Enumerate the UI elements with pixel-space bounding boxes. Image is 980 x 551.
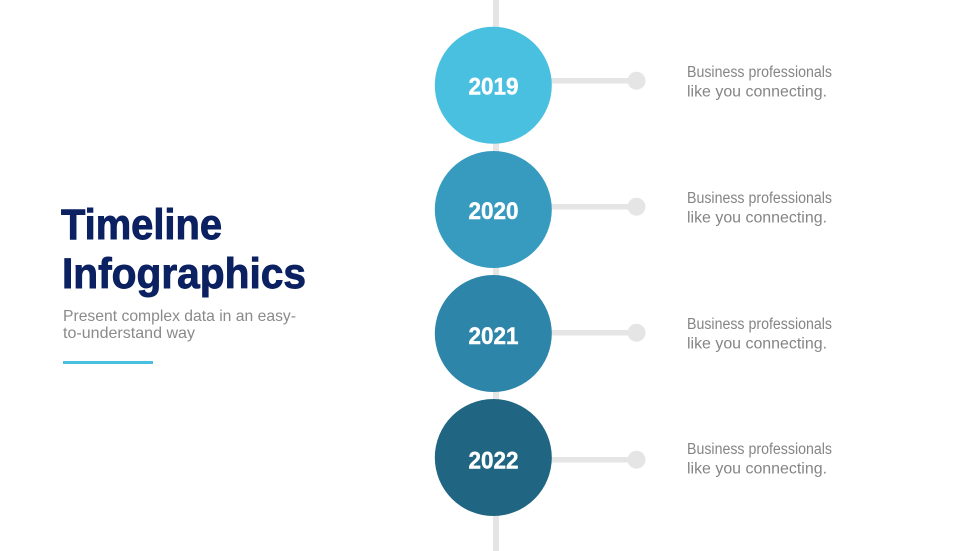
title: [61, 201, 306, 298]
year label: 2019: [468, 74, 518, 100]
connector with dot: [550, 198, 646, 216]
timeline item: 2019: [435, 27, 832, 144]
left heading block: [61, 201, 306, 364]
vertical timeline axis: [493, 0, 499, 551]
subtitle: Present complex data in an easy-: [63, 308, 296, 325]
description: [687, 190, 832, 226]
timeline item: 2020: [435, 151, 832, 268]
year label: 2021: [468, 323, 518, 350]
title: Timeline: [61, 201, 222, 249]
connector with dot: [550, 451, 646, 469]
timeline item: 2021: [435, 275, 832, 392]
description: like you connecting.: [687, 460, 827, 478]
year circle: [435, 151, 552, 268]
connector with dot: [550, 324, 646, 342]
description: Business professionals: [687, 190, 832, 207]
year circle: [435, 399, 552, 516]
timeline item: 2022: [435, 399, 832, 516]
accent underline: [63, 361, 153, 364]
description: Business professionals: [687, 64, 832, 81]
year circle: [435, 275, 552, 392]
year label: 2022: [468, 448, 518, 474]
year circle: [435, 27, 552, 144]
description: Business professionals: [687, 316, 832, 333]
year label: 2020: [468, 198, 518, 225]
description: [687, 316, 832, 352]
description: like you connecting.: [687, 336, 827, 352]
title: Infographics: [62, 250, 306, 298]
subtitle: [63, 308, 296, 342]
description: like you connecting.: [687, 210, 827, 226]
description: Business professionals: [687, 441, 832, 458]
subtitle: to-understand way: [63, 325, 195, 342]
description: [687, 441, 832, 478]
description: [687, 64, 832, 100]
connector with dot: [550, 72, 646, 90]
description: like you connecting.: [687, 84, 827, 100]
